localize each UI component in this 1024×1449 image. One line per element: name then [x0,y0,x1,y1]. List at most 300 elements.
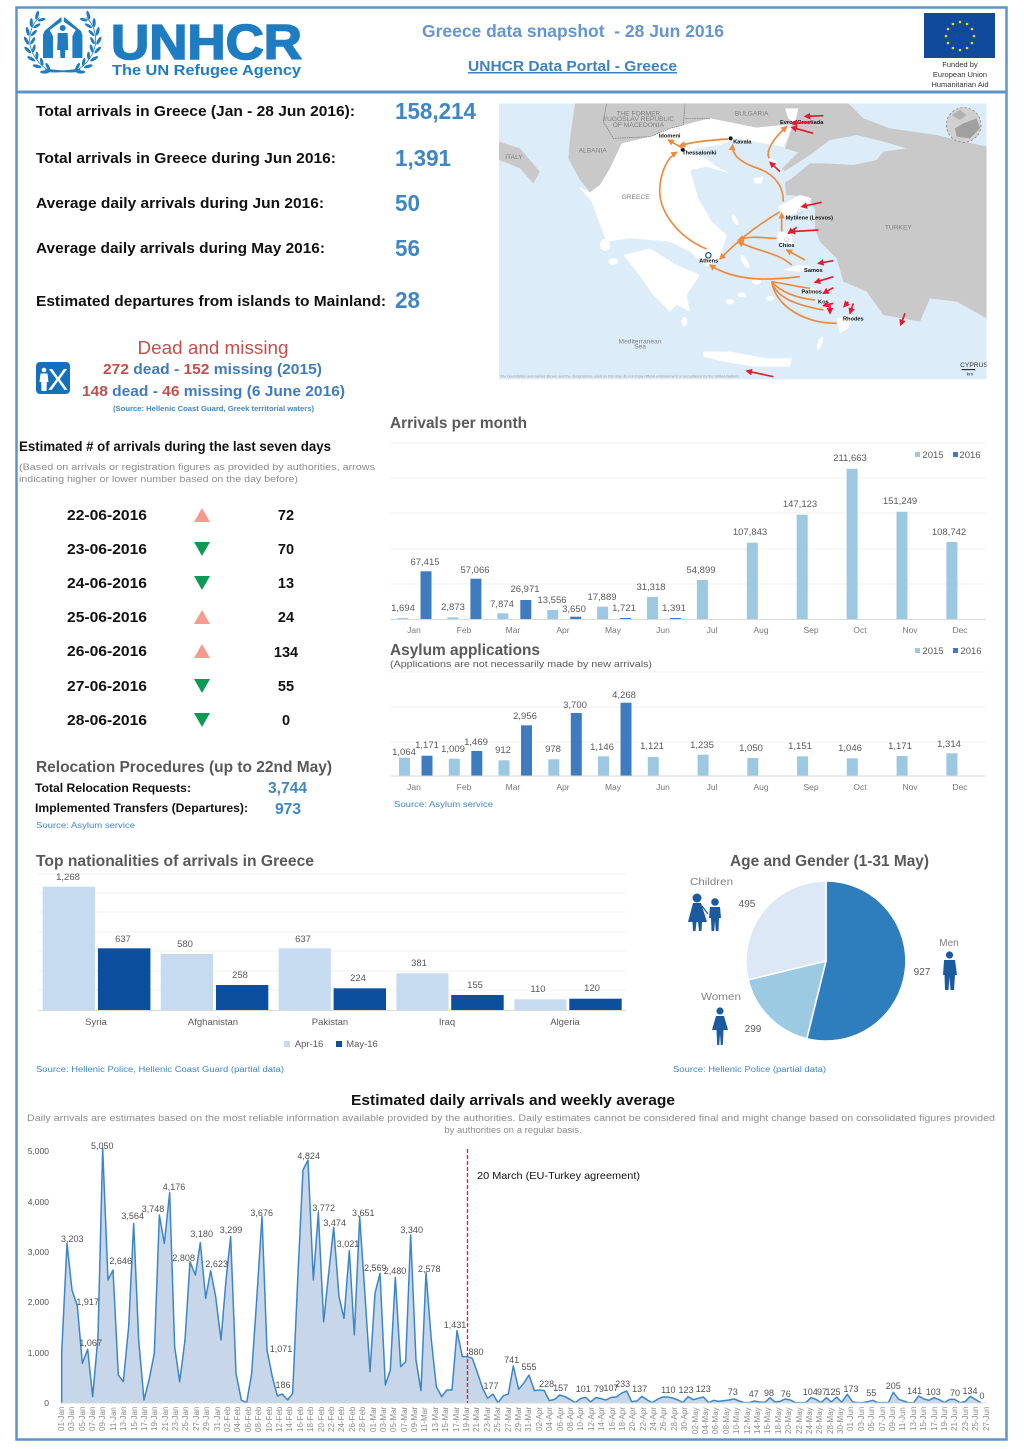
peak labels: 3,474 [323,1218,346,1228]
category labels: Syria [85,1017,108,1028]
axis [61,1402,986,1404]
map labels: TURKEY [885,225,912,232]
value labels: 1,721 [612,603,636,614]
note: by authorities on a regular basis. [444,1125,582,1136]
daily chart date axis: 19-Jun [940,1407,949,1431]
peak labels: 1,917 [76,1297,99,1307]
peak labels: 110 [661,1385,675,1395]
legend: 2015 [922,450,944,461]
chart: top nationalities [36,853,626,1074]
heading: Dead and missing [138,338,288,358]
table rows: 72 [278,508,294,524]
city markers [681,136,802,258]
EU funding note: European Union [933,70,987,79]
value labels: 31,318 [636,582,666,593]
EU-Turkey marker: 20 March (EU-Turkey agreement) [477,1170,640,1182]
value labels: 258 [232,970,248,981]
daily chart date axis: 19-Mar [462,1407,471,1432]
daily chart date axis: 02-Feb [223,1407,232,1432]
peak labels: 1,431 [444,1320,466,1330]
value labels: 26,971 [510,584,540,595]
peak labels: 134 [962,1386,978,1396]
land: neighbouring countries [499,103,987,322]
stat: June arrivals: Total arrivals in Greece during Jun 2016: [36,150,336,167]
month labels: Apr [556,782,570,792]
bars 2016 [422,703,632,776]
stat: departures to mainland: 28 [395,287,420,313]
peak labels: 555 [521,1362,537,1372]
peak labels: 3,676 [250,1208,273,1218]
value labels: 108,742 [932,527,966,538]
daily chart date axis: 29-Jan [202,1407,211,1431]
daily chart date axis: 29-Mar [514,1407,523,1432]
daily chart date axis: 28-May [826,1407,835,1434]
month labels: Feb [457,782,472,792]
daily chart date axis: 13-Mar [431,1407,440,1432]
stat: daily average May: Average daily arrivals during May 2016: [36,240,325,257]
map labels [505,111,912,350]
daily chart date axis: 12-May [743,1407,752,1434]
peak labels: 137 [632,1384,647,1394]
bars May [98,948,622,1010]
map labels: Patmos [801,289,822,295]
daily chart date axis: 23-Jan [171,1407,180,1431]
panel: relocation [35,759,332,830]
value labels: 211,663 [833,453,867,464]
daily chart date axis: 11-Mar [420,1407,429,1432]
bars 2016 [420,571,681,619]
daily chart date axis: 24-May [805,1407,814,1434]
note: (Based on arrivals or registration figures as provided by authorities, arrows [19,462,375,473]
daily chart date axis: 12-Feb [275,1407,284,1432]
value labels [392,690,961,758]
label: women: 299 [745,1024,762,1035]
daily chart date axis: 06-Apr [556,1407,565,1431]
table rows: 27-06-2016 [67,679,147,695]
EU funding note: Funded by [942,60,978,69]
stat: June arrivals: 1,391 [395,145,451,171]
peak labels: 1,071 [270,1344,292,1354]
month labels: Jun [656,782,670,792]
peak labels: 173 [843,1384,859,1394]
map labels: Mytilene (Lesvos) [786,215,833,221]
peak labels: 101 [576,1384,591,1394]
daily chart date axis: 18-Feb [306,1407,315,1432]
icon: globe locator [946,108,981,142]
stat: daily average June [36,190,420,216]
note: Daily arrivals are estimates based on the most reliable information available provided by the authorities. Daily estimates cannot be considered final and might change based on consolidated figures provided [27,1113,995,1124]
daily chart date axis: 18-May [774,1407,783,1434]
table rows: 13 [278,576,294,592]
source: Source: Asylum service [394,800,494,809]
daily chart date axis: 08-May [722,1407,731,1434]
month labels: Aug [753,625,769,635]
daily chart date axis: 14-Feb [285,1407,294,1432]
pie [746,881,906,1041]
figures 2015: 272 dead - 152 missing (2015) [103,361,322,378]
value labels: 1,694 [391,603,415,614]
y axis labels: 4,000 [28,1197,49,1207]
daily chart date axis: 26-Feb [348,1407,357,1432]
peak labels: 0 [979,1391,985,1401]
map labels: Kos [818,299,829,305]
month labels: Nov [902,625,918,635]
map labels: Sea [634,343,646,350]
peak labels: 98 [764,1388,774,1398]
peak labels: 186 [275,1380,291,1390]
legend: 2015 [922,646,944,657]
daily chart date axis: 23-Jun [961,1407,970,1431]
y axis labels: 2,000 [28,1297,49,1307]
chart: age and gender [673,853,959,1074]
implemented transfers: Implemented Transfers (Departures): [35,801,248,815]
daily chart date axis: 20-Feb [317,1407,326,1432]
arrows: onward routes [660,127,837,323]
daily chart date axis: 22-May [795,1407,804,1434]
value labels: 224 [350,973,366,984]
table rows: 24 [278,610,294,626]
peak labels: 4,824 [297,1151,320,1161]
daily chart date axis: 09-Jan [98,1407,107,1431]
peak labels: 3,772 [312,1203,335,1213]
month labels: May [605,625,622,635]
bars 2015 [399,753,957,776]
map labels: Chios [779,243,795,249]
month labels: Dec [952,625,968,635]
daily chart date axis: 17-Jan [140,1407,149,1431]
map labels: BULGARIA [735,111,769,118]
peak labels: 47 [749,1389,759,1399]
peak labels: 2,808 [172,1253,195,1263]
peak labels: 177 [483,1381,499,1391]
map labels: Mediterranean [619,338,662,345]
daily chart date axis: 14-Apr [597,1407,606,1431]
table rows: 134 [274,645,298,661]
y axis labels [28,1146,49,1408]
daily chart date axis: 26-Apr [659,1407,668,1431]
value labels: 1,151 [788,741,812,752]
peak labels: 97 [817,1387,827,1397]
value labels: 4,268 [612,690,636,701]
peak labels: 233 [615,1379,630,1389]
daily chart date axis: 21-Jan [161,1407,170,1431]
value labels: 1,391 [662,603,686,614]
heading: Age and Gender (1-31 May) [730,853,929,870]
value labels: 147,123 [783,499,817,510]
value labels: 1,121 [640,741,664,752]
heading: Top nationalities of arrivals in Greece [36,853,314,870]
daily chart date axis: 17-Jun [930,1407,939,1431]
daily chart date axis: 05-Jun [867,1407,876,1431]
legend: May-16 [346,1039,378,1050]
daily chart date axis: 03-Jan [67,1407,76,1431]
legend: 2016 [960,646,982,657]
value labels: 120 [584,983,600,994]
map labels: THE FORMER [616,111,661,118]
month labels: Aug [753,782,769,792]
peak labels: 1,067 [79,1338,102,1348]
map labels: OF MACEDONIA [613,122,665,129]
chart: arrivals per month [390,415,986,635]
value labels: 381 [411,958,427,969]
peak labels: 2,480 [384,1266,406,1276]
daily chart date axis: 20-Apr [628,1407,637,1431]
map labels: Idomeni [659,134,681,140]
stat: total arrivals: 158,214 [395,98,476,124]
daily chart date axis [57,1406,991,1434]
daily chart date axis: 16-Feb [296,1407,305,1432]
value labels: 1,146 [590,742,614,753]
peak labels: 103 [926,1387,941,1397]
peak labels: 70 [950,1388,960,1398]
value labels: 637 [295,934,311,945]
daily chart date axis: 11-Jan [109,1407,118,1431]
table rows: 24-06-2016 [67,576,147,592]
category labels: Algeria [550,1017,580,1028]
source: (Source: Hellenic Coast Guard, Greek territorial waters) [113,406,314,413]
implemented transfers: 973 [275,801,301,818]
daily chart date axis: 08-Feb [254,1407,263,1432]
value labels: 3,650 [562,604,586,615]
daily chart date axis: 18-Apr [618,1407,627,1431]
value labels: 1,469 [464,737,488,748]
relocation requests: 3,744 [268,780,307,797]
icon: dead and missing: X [48,362,69,397]
month labels: Nov [902,782,918,792]
value labels: 2,873 [441,602,465,613]
category labels: Afghanistan [188,1017,238,1028]
map labels: ITALY [505,154,523,161]
category labels: Iraq [439,1017,455,1028]
heading: Arrivals per month [390,415,527,432]
stat: daily average May [36,235,420,261]
value labels [56,872,600,995]
value labels: 1,314 [937,739,961,750]
key figures [36,98,476,313]
stat: total arrivals [36,98,476,124]
gridlines [390,672,986,742]
value labels: 1,050 [739,743,763,754]
daily chart date axis: 17-Mar [452,1407,461,1432]
value labels [391,453,966,615]
y axis labels: 3,000 [28,1247,49,1257]
stat: daily average June: 50 [395,190,420,216]
value labels: 17,889 [587,592,617,603]
value labels: 1,268 [56,872,80,883]
value labels: 151,249 [883,496,917,507]
source: Source: Hellenic Police, Hellenic Coast Guard (partial data) [36,1065,284,1074]
daily chart date axis: 01-Jan [57,1407,66,1431]
daily chart date axis: 07-Jun [878,1407,887,1431]
daily chart date axis: 15-Mar [441,1407,450,1432]
month labels: Apr [556,625,570,635]
value labels: 580 [177,939,193,950]
legend: 2016 [959,450,981,461]
daily chart date axis: 21-Mar [472,1407,481,1432]
gridlines [38,874,626,990]
stat: total arrivals: Total arrivals in Greece (Jan - 28 Jun 2016): [36,103,355,120]
icon: woman [712,1007,728,1045]
daily chart date axis: 31-Jan [213,1407,222,1431]
map labels: Kavala [733,140,752,146]
map labels: GREECE [622,194,650,201]
daily chart date axis: 03-Mar [379,1407,388,1432]
daily chart date axis: 06-Feb [244,1407,253,1432]
daily chart date axis: 04-Feb [233,1407,242,1432]
note [27,1113,995,1136]
peak labels: 107 [603,1383,619,1393]
peak labels: 123 [678,1385,694,1395]
chart: asylum applications [390,642,986,809]
value labels: 912 [495,745,511,756]
peak labels: 104 [803,1387,818,1397]
table rows: 23-06-2016 [67,542,147,558]
axis [390,618,986,620]
table rows: 70 [278,542,294,558]
peak labels: 73 [728,1387,738,1397]
value labels: 978 [545,744,561,755]
daily chart date axis: 10-May [732,1407,741,1434]
value labels: 637 [115,934,131,945]
table rows: 55 [278,679,294,695]
peak labels: 3,203 [61,1234,84,1244]
peak labels: 3,748 [142,1204,164,1214]
daily chart date axis: 25-Jun [971,1407,980,1431]
peak labels: 205 [886,1381,901,1391]
logo wordmark: UNHCR [111,16,302,70]
table rows: 0 [282,713,290,729]
legend [915,646,982,657]
daily chart date axis: 05-Jan [78,1407,87,1431]
month labels: Jul [707,782,718,792]
daily chart date axis: 27-Jun [982,1407,991,1431]
value labels: 1,171 [888,741,912,752]
daily chart date axis: 12-Apr [587,1407,596,1431]
area and line series [62,1148,981,1403]
label: women [701,992,762,1035]
daily chart date axis: 10-Apr [576,1407,585,1431]
month labels: Oct [853,782,867,792]
scale bar: CYPRUS [960,362,988,369]
month labels [407,625,968,635]
heading: Estimated # of arrivals during the last seven days [19,438,331,454]
month labels: Oct [853,625,867,635]
value labels: 1,171 [415,740,439,751]
month labels: Jan [407,782,421,792]
daily chart date axis: 25-Jan [181,1407,190,1431]
label: men: 927 [914,967,931,978]
month labels: Feb [457,625,472,635]
daily chart date axis: 30-Apr [680,1407,689,1431]
figures 2016: 148 dead - 46 missing (6 June 2016) [82,383,345,400]
month labels: Sep [803,782,819,792]
source: Source: Hellenic Police (partial data) [673,1065,826,1074]
daily chart date axis: 15-Jan [130,1407,139,1431]
icon: children [688,894,721,931]
axis [38,1010,626,1012]
map labels: Evros/Orestiada [780,120,824,126]
relocation requests [35,780,307,797]
value labels: 107,843 [733,527,767,538]
category labels [85,1017,580,1028]
peak labels: 2,569 [364,1263,387,1273]
implemented transfers [35,801,301,818]
month labels: Dec [952,782,968,792]
peak labels: 3,180 [190,1229,213,1239]
daily chart date axis: 03-Jun [857,1407,866,1431]
daily chart date axis: 09-Jun [888,1407,897,1431]
value labels: 7,874 [490,599,514,610]
land: Greece [578,108,853,367]
daily chart date axis: 01-Jun [846,1407,855,1431]
source: Source: Asylum service [36,821,136,830]
daily chart date axis: 08-Apr [566,1407,575,1431]
peak labels: 123 [696,1384,711,1394]
value labels: 67,415 [410,557,440,568]
peak labels: 3,299 [220,1225,242,1235]
note [19,462,375,485]
month labels: May [605,782,622,792]
data portal link: UNHCR Data Portal - Greece [468,58,677,75]
peak labels: 79 [594,1384,604,1394]
stat: departures to mainland: Estimated departures from islands to Mainland: [36,293,386,310]
value labels: 155 [467,980,483,991]
daily chart date axis: 16-May [763,1407,772,1434]
sea of Marmara [785,135,907,182]
daily chart date axis: 13-Jan [119,1407,128,1431]
daily chart date axis: 26-May [815,1407,824,1434]
map labels: Samos [804,268,823,274]
label: children: Children [690,877,733,888]
value labels: 110 [530,984,546,995]
label: children: 495 [739,899,756,910]
month labels: Sep [803,625,819,635]
map labels: Thessaloniki [682,150,717,156]
value labels: 1,009 [441,744,465,755]
daily chart date axis: 25-Mar [493,1407,502,1432]
daily chart date axis: 27-Mar [504,1407,513,1432]
daily chart date axis: 07-Mar [400,1407,409,1432]
daily chart date axis: 20-May [784,1407,793,1434]
map labels: Rhodes [843,316,864,322]
stat: daily average May: 56 [395,235,420,261]
month labels [407,782,968,792]
map: routes through Greece [499,103,988,379]
value labels: 13,556 [537,595,567,606]
daily chart date axis: 21-Jun [950,1407,959,1431]
table rows [67,508,298,729]
stat: departures to mainland [36,287,420,313]
icon: man [943,951,957,990]
map labels: YUGOSLAV REPUBLIC [603,116,674,123]
peak labels: 880 [468,1347,484,1357]
daily chart date axis: 22-Feb [327,1407,336,1432]
daily chart date axis: 28-Apr [670,1407,679,1431]
month labels: Mar [506,625,520,635]
peak labels: 3,340 [400,1225,423,1235]
relocation requests: Total Relocation Requests: [35,781,191,795]
peak labels: 2,646 [109,1256,132,1266]
chart: daily arrivals [27,1092,995,1408]
daily chart date axis: 24-Apr [649,1407,658,1431]
legend: Apr-16 [295,1039,323,1050]
peak labels: 76 [781,1389,791,1399]
heading: Relocation Procedures (up to 22nd May) [36,759,332,776]
daily chart date axis: 07-Jan [88,1407,97,1431]
peak labels: 157 [553,1383,568,1393]
daily chart date axis: 19-Jan [150,1407,159,1431]
logo wordmark: The UN Refugee Agency [112,62,302,79]
